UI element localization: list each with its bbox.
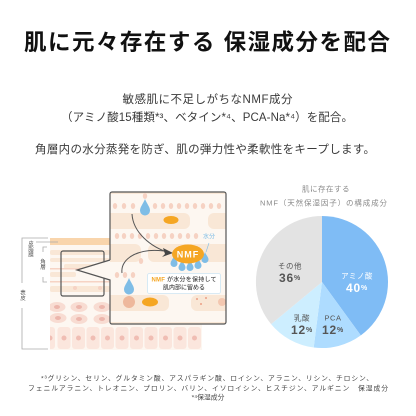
- label: amino acids: [341, 270, 373, 295]
- label: PCA: 12%: [322, 323, 344, 337]
- pointer: [77, 260, 111, 280]
- slice: lactic acid 12%: [271, 282, 322, 348]
- chart heading: NMF（天然保湿因子）の構成成分: [260, 198, 388, 208]
- callout: [148, 274, 220, 294]
- text block: description: 角層内の水分蒸発を防ぎ、肌の弾力性や柔軟性をキープします。: [35, 142, 375, 156]
- slice: PCA 12%: [314, 282, 361, 348]
- label: water: [203, 232, 215, 252]
- label: 皮脂膜: 皮脂膜: [27, 240, 34, 259]
- icon: water drop top: [140, 199, 150, 216]
- diagram: skin cross-section: [19, 189, 240, 350]
- label: other: [278, 260, 302, 285]
- water drops around NMF: [170, 252, 208, 271]
- small selection box: [61, 251, 104, 296]
- callout: NMF が水分を保持して: [152, 276, 216, 284]
- icon: water drop lower: [124, 278, 134, 294]
- label: lactic acid: 12%: [291, 323, 313, 337]
- chart heading: [260, 184, 388, 208]
- arrow head: [162, 248, 173, 257]
- footnotes: *⁴保湿成分: [192, 392, 225, 402]
- pie chart: [256, 216, 388, 348]
- title: 肌に元々存在する 保湿成分を配合: [24, 30, 390, 55]
- NMF badge: [172, 244, 204, 264]
- text block: description: 敏感肌に不足しがちなNMF成分: [122, 92, 293, 106]
- label: other: 36%: [279, 271, 301, 285]
- orange granules: [164, 216, 178, 224]
- label: lactic acid: 乳酸: [294, 312, 310, 322]
- footnotes: *³グリシン、セリン、グルタミン酸、アスパラギン酸、ロイシン、アラニン、リシン、チロシン、: [41, 374, 373, 382]
- label: 角層: 角層: [39, 257, 46, 271]
- skin layers: [44, 238, 202, 350]
- inset border: [77, 192, 226, 324]
- slice: amino acids 40%: [322, 216, 388, 335]
- NMF badge: NMF: [177, 250, 199, 260]
- arrow: water path one: [132, 214, 170, 253]
- label: side brackets: [22, 238, 58, 349]
- footnotes: フェニルアラニン、トレオニン、プロリン、バリン、イソロイシン、ヒスチジン、アルギニン 保湿成分: [28, 384, 388, 392]
- label: lactic acid: [291, 312, 313, 337]
- skin bands: [110, 192, 226, 324]
- label: other: その他: [278, 260, 302, 270]
- label: amino acids: アミノ酸: [341, 270, 373, 280]
- arrow: water path two: [122, 250, 170, 273]
- chart heading: 肌に存在する: [302, 184, 350, 194]
- label: PCA: PCA: [325, 314, 341, 322]
- text block: description: （アミノ酸15種類*³、ベタイン*⁴、PCA-Na*⁴）を配合。: [61, 110, 353, 124]
- slice: other 36%: [256, 216, 322, 324]
- label: water: 水分: [203, 232, 215, 240]
- footnotes: [28, 374, 388, 402]
- text block: description: [35, 92, 375, 156]
- callout: 肌内部に留める: [163, 284, 205, 292]
- magnified inset: [77, 189, 240, 327]
- label: PCA: [322, 314, 344, 337]
- label: 表皮: 表皮: [19, 288, 26, 302]
- label: amino acids: 40%: [346, 281, 368, 295]
